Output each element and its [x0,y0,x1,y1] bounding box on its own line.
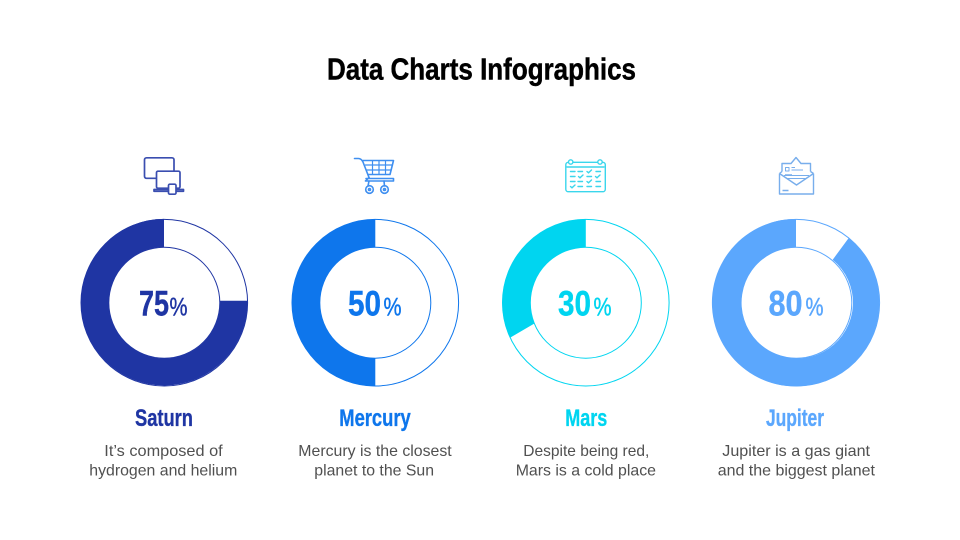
icon: shopping cart [354,158,394,193]
panel: Mars [502,160,669,479]
icon: calendar [566,160,605,192]
donut chart: 30%: % [594,294,612,322]
description: Jupiter is a gas giant [722,443,871,460]
description: Mars is a cold place [516,462,656,479]
donut chart: 30% [502,219,669,386]
name: Mercury [339,405,411,432]
donut chart: 80%: % [806,294,824,322]
panel: Saturn [81,158,248,479]
description: Despite being red, [523,443,649,460]
panel: Mercury [292,158,459,479]
value: 30 [558,284,591,324]
value: 80 [768,284,802,324]
donut chart: 50% [292,219,459,386]
name: Saturn [135,405,193,432]
description: planet to the Sun [314,462,434,479]
donut chart: 80% [712,219,880,386]
description: It’s composed of [104,443,223,460]
value: 50 [348,284,381,324]
name: Mars [565,405,607,432]
name: Jupiter [766,405,824,432]
donut chart: 75%: % [170,294,188,322]
icon: devices [144,158,184,194]
description: hydrogen and helium [89,462,237,479]
icon: open envelope [780,158,814,194]
description: and the biggest planet [718,462,876,479]
donut chart: 50%: % [384,294,402,322]
title: Data Charts Infographics [327,51,636,86]
donut chart: 75% [81,219,248,386]
panel: Jupiter [712,158,880,479]
description: Mercury is the closest [298,443,452,460]
value: 75 [139,284,169,324]
